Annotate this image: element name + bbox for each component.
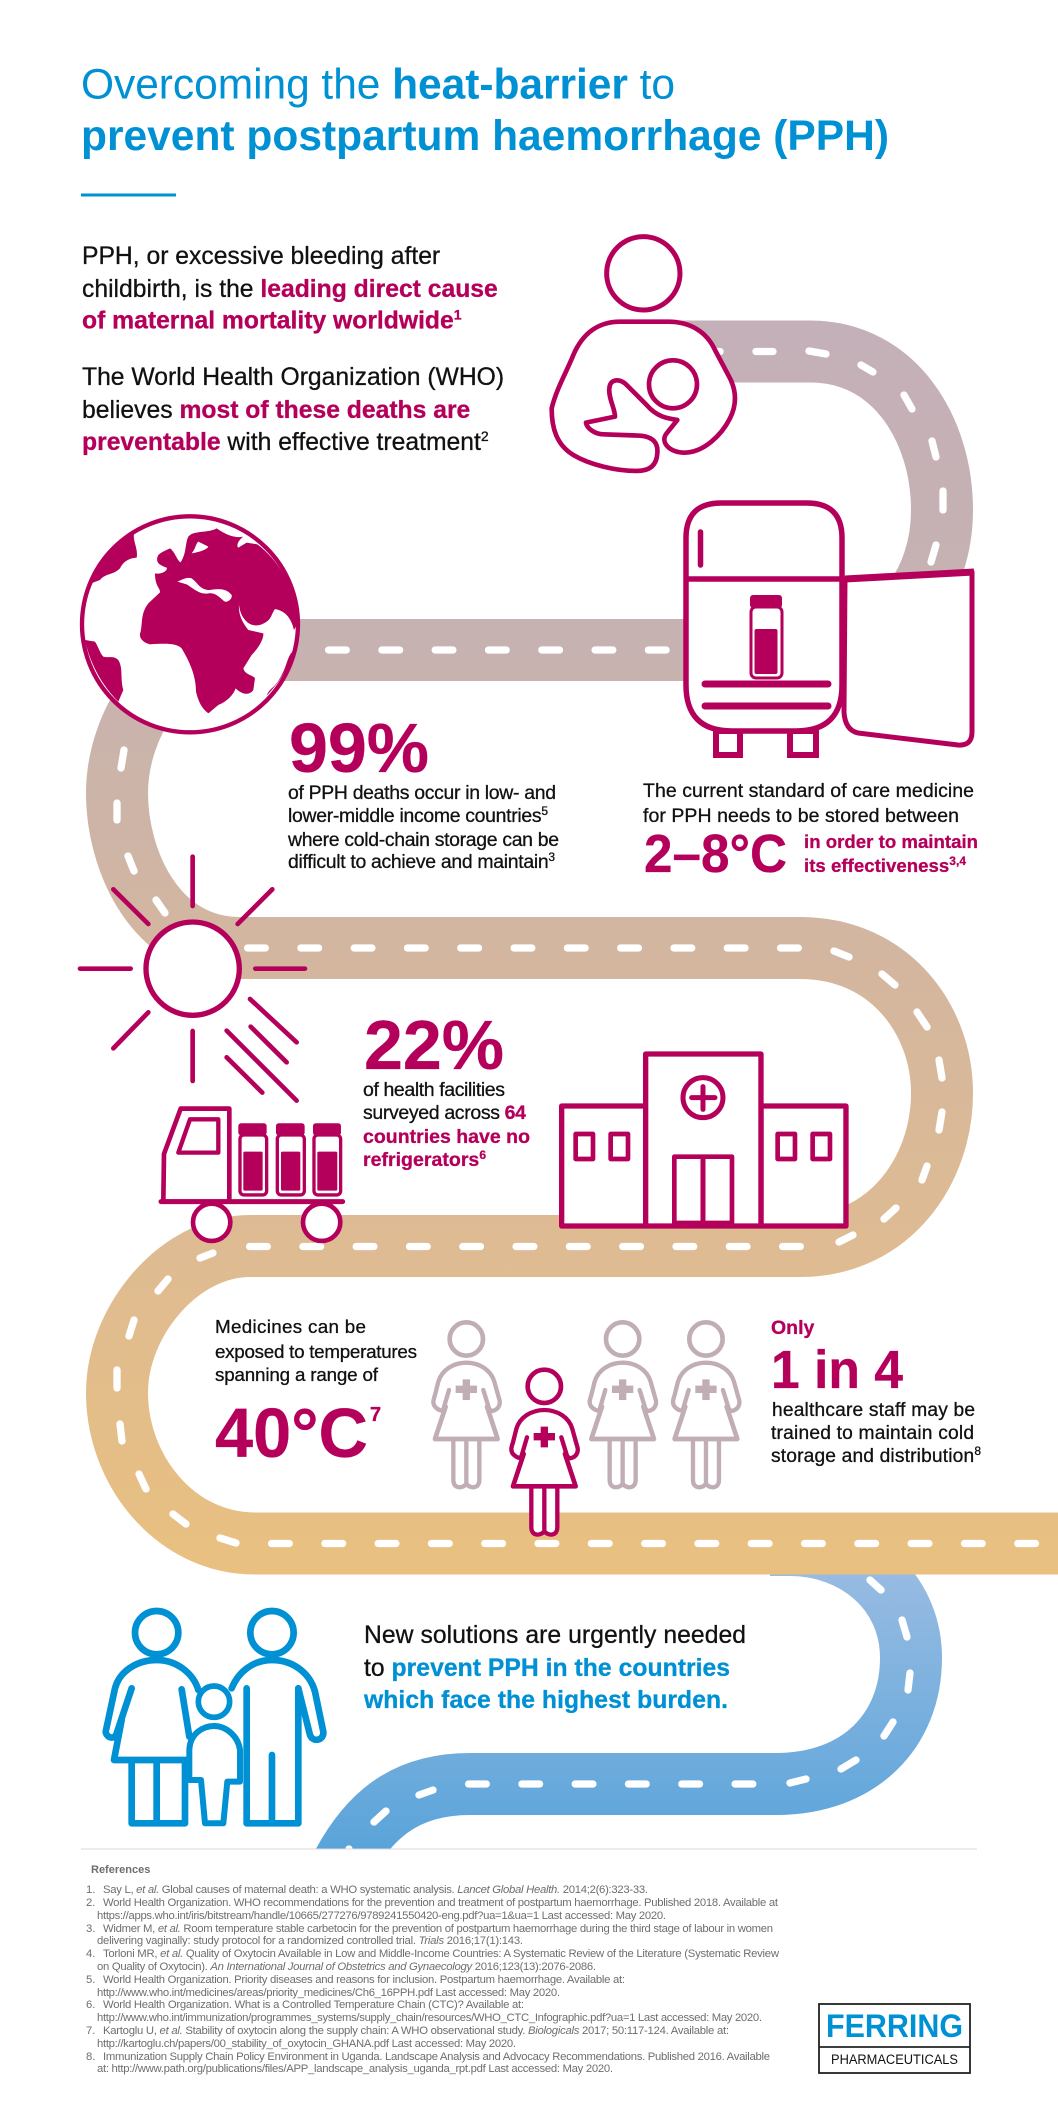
temperature range text: 7 [370,1404,381,1426]
title: prevent postpartum haemorrhage (PPH) [81,113,889,160]
references: 6. [86,1999,95,2011]
icon: fridge with vial [686,503,974,755]
stat: 99 percent: 99% [289,709,429,787]
nurse outline 3 [673,1322,739,1487]
temperature range text: spanning a range of [215,1364,379,1385]
icon: hospital [562,1054,846,1226]
storage temperature text: 3,4 [949,854,966,868]
references: 3. [86,1923,95,1935]
icon: family [106,1611,323,1823]
logo: Ferring Pharmaceuticals [819,2004,970,2073]
closing message: New solutions are urgently needed [364,1622,746,1649]
nurse outline 2 [590,1322,656,1487]
logo: Ferring Pharmaceuticals: PHARMACEUTICALS [831,2052,958,2067]
stat: 1 in 4: 8 [974,1444,981,1458]
references: 4. [86,1948,95,1960]
stat: 99 percent: 5 [541,804,548,818]
stat: 99 percent: of PPH deaths occur in low- and [288,782,556,804]
stat: 99 percent [287,709,559,873]
icon: nurses [433,1322,739,1535]
stat: 1 in 4: Only [771,1317,814,1339]
title rule [81,194,176,196]
references: 8. [86,2051,95,2063]
icon: globe [82,516,299,732]
references: Torloni MR, et al. Quality of Oxytocin Available in Low and Middle-Income Countries: A Systematic Review of the Literature (Systematic Review [103,1948,780,1960]
references: 2. [86,1897,95,1909]
stat: 99 percent: lower-middle income countries [288,805,542,827]
stat: 99 percent: 3 [548,850,555,864]
stat: 1 in 4: trained to maintain cold [771,1423,974,1444]
stat: 1 in 4: 1 in 4 [771,1340,903,1400]
references: http://kartoglu.ch/papers/00_stability_of_oxytocin_GHANA.pdf Last accessed: May 2020. [97,2038,516,2050]
blue road [316,1574,942,1848]
storage temperature text: The current standard of care medicine [643,780,974,802]
intro text: 2 [481,428,489,444]
stat: 22 percent: of health facilities [363,1079,505,1101]
temperature range text: Medicines can be [215,1316,366,1337]
references: 1. [86,1884,95,1896]
references: 5. [86,1974,95,1986]
references rule [81,1848,977,1850]
references: delivering vaginally: study protocol for a randomized controlled trial. Trials 2016;17(1):143. [97,1935,523,1947]
storage temperature text: its effectiveness [804,855,949,876]
temperature range text: exposed to temperatures [215,1341,417,1362]
temperature range text: 40°C [215,1394,368,1472]
references [86,1864,780,2075]
intro text: The World Health Organization (WHO) [82,364,504,391]
references: http://www.who.int/medicines/areas/priority_medicines/Ch6_16PPH.pdf Last accessed: May 2020. [97,1987,560,1999]
icon: mother and baby [552,237,735,471]
storage temperature text: 2–8°C [644,824,787,884]
closing message: which face the highest burden. [363,1687,728,1714]
stat: 22 percent: 22% [364,1006,504,1084]
temperature range text [215,1316,417,1472]
stat: 1 in 4: storage and distribution [771,1446,974,1467]
stat: 99 percent: difficult to achieve and maintain [288,851,549,873]
intro text: of maternal mortality worldwide [82,308,454,334]
references: World Health Organization. WHO recommendations for the prevention and treatment of postpartum haemorrhage. Published 2018. Available at [103,1897,779,1909]
winding road [117,351,1058,1544]
storage temperature text: in order to maintain [804,831,978,852]
stat: 99 percent: where cold-chain storage can be [287,829,559,851]
storage temperature text [643,780,978,884]
references: Say L, et al. Global causes of maternal death: a WHO systematic analysis. Lancet Global Health. 2014;2(6):323-33. [103,1884,648,1896]
stat: 1 in 4 [771,1317,981,1467]
storage temperature text: for PPH needs to be stored between [643,805,959,827]
title [81,62,889,160]
references: World Health Organization. Priority diseases and reasons for inclusion. Postpartum haemorrhage. Available at: [103,1974,625,1986]
stat: 1 in 4: healthcare staff may be [772,1400,975,1421]
references: at: http://www.path.org/publications/files/APP_landscape_analysis_uganda_rpt.pdf Last accessed: May 2020. [97,2063,613,2075]
nurse outline 1 [433,1322,500,1487]
references: Kartoglu U, et al. Stability of oxytocin along the supply chain: A WHO observational study. Biologicals 2017; 50:117-124. Available at: [103,2025,729,2037]
stat: 22 percent [363,1006,530,1171]
intro text: believes most of these deaths are [82,397,470,424]
icon: sun [80,857,305,1101]
stat: 22 percent: 6 [479,1148,486,1162]
references: https://apps.who.int/iris/bitstream/handle/10665/277276/9789241550420-eng.pdf?ua=1&ua=1 Last accessed: May 2020. [97,1910,666,1922]
logo: Ferring Pharmaceuticals: FERRING [826,2008,963,2044]
references: http://www.who.int/immunization/programmes_systems/supply_chain/resources/WHO_CTC_Infographic.pdf?ua=1 Last accessed: May 2020. [97,2012,762,2024]
references: Widmer M, et al. Room temperature stable carbetocin for the prevention of postpartum haemorrhage during the third stage of labour in women [103,1923,773,1935]
intro text: preventable with effective treatment [82,429,481,456]
closing message: to prevent PPH in the countries [364,1655,730,1682]
references: World Health Organization. What is a Controlled Temperature Chain (CTC)? Available at: [103,1999,524,2011]
references: Immunization Supply Chain Policy Environment in Uganda. Landscape Analysis and Advocacy Recommendations. Published 2016. Available [103,2051,770,2063]
stat: 22 percent: countries have no [363,1126,530,1148]
icon: truck with vials [161,1109,343,1241]
stat: 22 percent: surveyed across 64 [363,1102,526,1124]
title: Overcoming the heat-barrier to [81,62,675,108]
references: 7. [86,2025,95,2037]
intro text: PPH, or excessive bleeding after [82,243,440,270]
intro text [82,243,504,456]
stat: 22 percent: refrigerators [363,1149,479,1171]
intro text: childbirth, is the leading direct cause [82,276,498,303]
closing message [363,1622,746,1714]
highlighted nurse [511,1370,578,1535]
intro text: 1 [454,306,462,322]
references: References [91,1864,150,1876]
references: on Quality of Oxytocin). An International Journal of Obstetrics and Gynaecology 2016;123(13):2076-2086. [97,1961,596,1973]
